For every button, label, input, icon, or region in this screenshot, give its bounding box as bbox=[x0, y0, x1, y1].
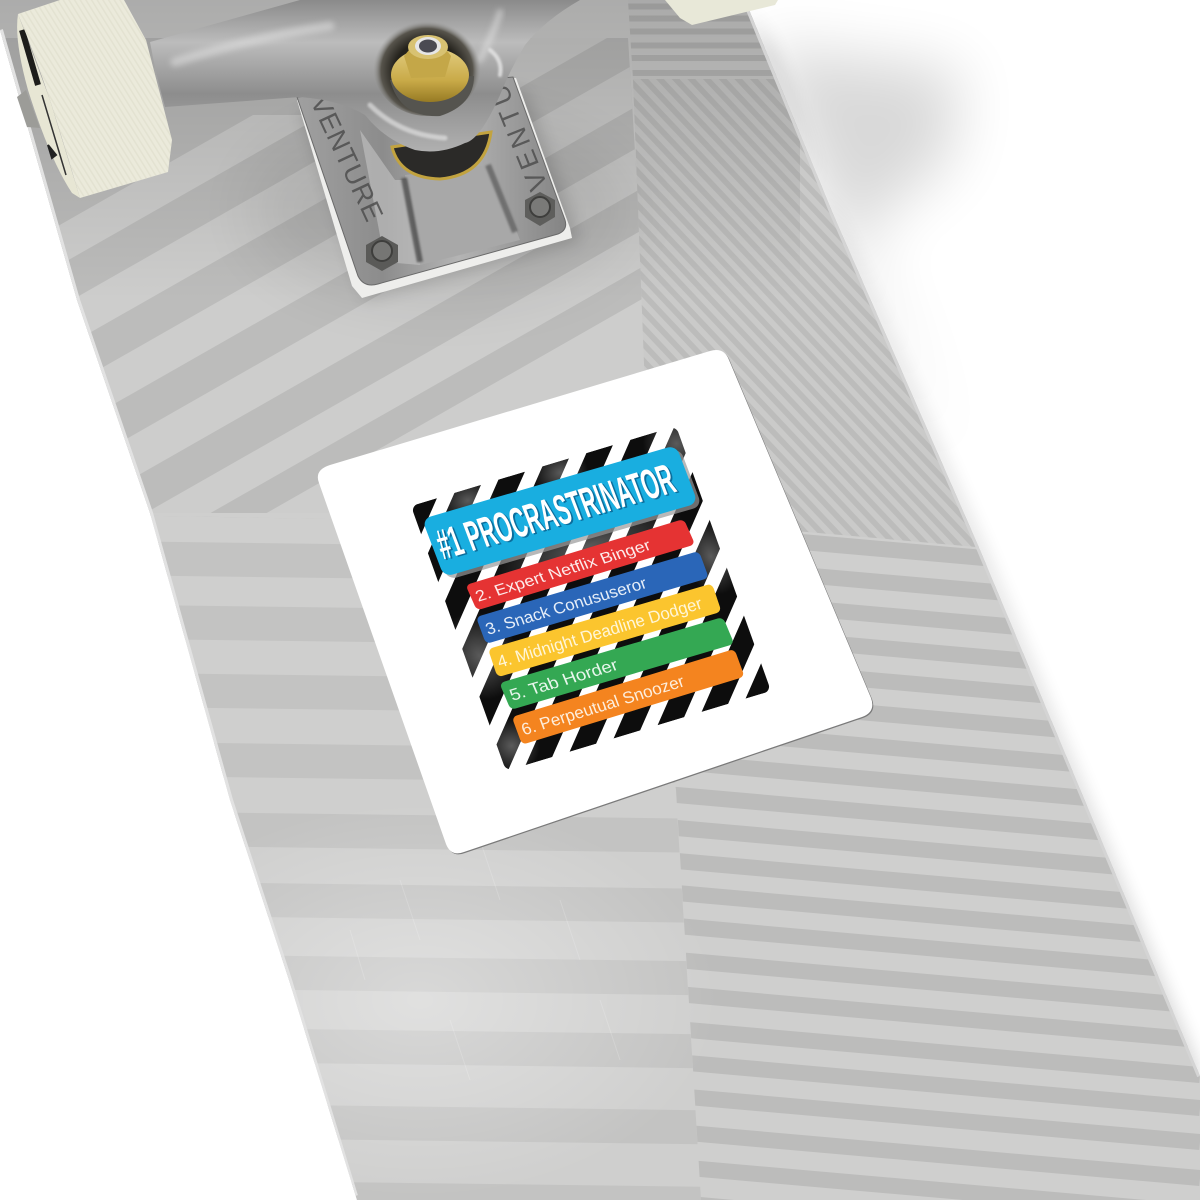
left wheel bbox=[17, 0, 172, 198]
title bar: #1 PROCRASTRINATOR: #1 PROCRASTRINATOR bbox=[430, 456, 682, 569]
deck pattern: thin horizontal stripes, top bbox=[628, 4, 776, 76]
bar 3: Snack Conususeror bbox=[476, 551, 709, 644]
truck hanger bbox=[150, 0, 580, 151]
mounting bolt left bbox=[366, 236, 398, 271]
hazard stripe background bbox=[412, 428, 770, 770]
truck shadow on deck bbox=[300, 90, 580, 300]
white sticker base bbox=[318, 350, 872, 853]
title bar: #1 PROCRASTRINATOR bbox=[422, 445, 698, 577]
sticker edge shadow bbox=[319, 351, 873, 854]
embossed VENTURE lettering left: VENTURE bbox=[305, 91, 389, 227]
bar 2: Expert Netflix Binger: 2. Expert Netflix Binger bbox=[473, 537, 654, 605]
gold kingpin washer bbox=[391, 48, 469, 102]
bar 3: Snack Conususeror: 3. Snack Conususeror bbox=[483, 574, 650, 639]
bar 6: Perpeutual Snoozer bbox=[512, 649, 745, 745]
bar 2: Expert Netflix Binger bbox=[466, 519, 695, 610]
sticker bbox=[318, 350, 874, 854]
lower bushing with gold ring bbox=[392, 132, 491, 179]
bar 5: Tab Horder: 5. Tab Horder bbox=[507, 656, 621, 705]
title bar shadow bbox=[426, 448, 702, 580]
deck pattern: thin horizontal stripes, lower right bbox=[676, 534, 1200, 1200]
deck pattern: wide horizontal stripes, lower left bbox=[158, 542, 701, 1200]
kingpin hole bbox=[373, 16, 481, 116]
title bar: #1 PROCRASTRINATOR: #1 PROCRASTRINATOR bbox=[432, 457, 684, 570]
kingpin nut bbox=[404, 35, 451, 78]
deck pattern: thin diagonal stripes, upper right bbox=[633, 79, 979, 547]
truck assembly bbox=[17, 0, 778, 300]
bar 4: Midnight Deadline Dodger: 4. Midnight Deadline Dodger bbox=[495, 594, 705, 672]
deck pattern: chevron diagonal stripes bbox=[2, 38, 642, 516]
plate ridges bbox=[360, 130, 520, 265]
right wheel bbox=[665, 0, 778, 25]
upper bushing bbox=[390, 76, 474, 116]
hanger highlights bbox=[175, 12, 501, 138]
embossed VENTURE lettering right: VENTURE bbox=[464, 32, 554, 195]
board drop shadow bbox=[745, 10, 1195, 1100]
white riser pad bbox=[297, 78, 572, 298]
bar 6: Perpeutual Snoozer: 6. Perpeutual Snoozer bbox=[519, 671, 687, 739]
metal baseplate bbox=[297, 77, 566, 285]
bar 5: Tab Horder bbox=[499, 617, 734, 710]
mounting bolt right bbox=[525, 192, 555, 226]
